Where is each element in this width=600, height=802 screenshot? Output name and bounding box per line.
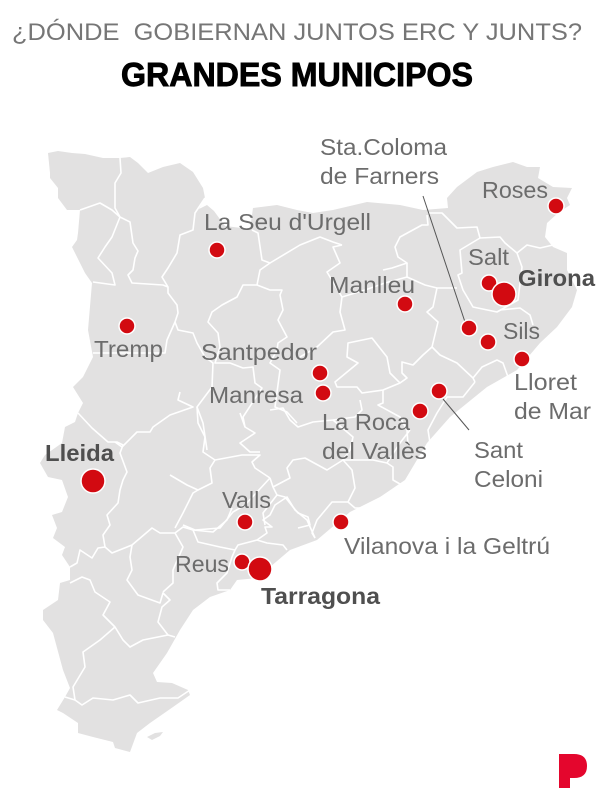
label: Sta. Coloma de Farners [320, 134, 447, 189]
label: La Seu d'Urgell: La Seu d'Urgell [204, 209, 371, 235]
marker: Lleida [81, 469, 105, 493]
map: comarca borders [65, 158, 553, 705]
label: Sant Celoni [474, 437, 543, 492]
title: question: ¿DÓNDE GOBIERNAN JUNTOS ERC Y JUNTS? [12, 19, 582, 46]
label: Sant Celoni: Celoni [474, 466, 543, 492]
label: Sant Celoni: Sant [474, 437, 524, 463]
marker: Manresa [315, 385, 331, 401]
municipality markers [81, 198, 564, 581]
label: Girona: Girona [518, 265, 595, 291]
marker: Reus [234, 554, 250, 570]
label: Lloret de Mar: de Mar [514, 398, 591, 424]
marker: Santpedor [312, 365, 328, 381]
map: territory silhouette [40, 151, 577, 752]
marker: Tremp [119, 318, 135, 334]
heading: grandes municipios: GRANDES MUNICIPOS [121, 56, 473, 93]
label: Tarragona: Tarragona [261, 583, 380, 609]
marker: Vilanova i la Geltrú [333, 514, 349, 530]
label: La Roca del Vallès [322, 409, 427, 464]
marker: Sant Celoni [431, 383, 447, 399]
label: La Roca del Vallès: La Roca [322, 409, 410, 435]
marker: Valls [237, 514, 253, 530]
label: Lloret de Mar: Lloret [514, 369, 578, 395]
icon: publisher logo P [559, 754, 587, 788]
marker: Sta. Coloma de Farners [461, 320, 477, 336]
label: Sta. Coloma de Farners: de Farners [320, 163, 439, 189]
map of Catalonia [40, 151, 577, 752]
marker: La Seu d'Urgell [209, 242, 225, 258]
map: Ebro island [147, 732, 163, 740]
label: Santpedor: Santpedor [201, 339, 317, 365]
label: La Roca del Vallès: del Vallès [322, 438, 427, 464]
marker: Roses [548, 198, 564, 214]
label: Valls: Valls [222, 487, 271, 513]
marker: Girona [492, 282, 516, 306]
marker: Sils [480, 334, 496, 350]
label: Manlleu: Manlleu [329, 272, 415, 298]
label: Lloret de Mar [514, 369, 591, 424]
label: Reus: Reus [175, 551, 229, 577]
label: Salt: Salt [468, 244, 510, 270]
leader line: Sta. Coloma de Farners [423, 196, 465, 322]
leader line: Sant Celoni [443, 399, 469, 430]
label: Sta. Coloma de Farners: Sta.Coloma [320, 134, 447, 160]
label: Tremp: Tremp [94, 336, 163, 362]
label: Vilanova i la Geltrú: Vilanova i la Geltrú [344, 533, 550, 559]
marker: Manlleu [397, 296, 413, 312]
label: Sils: Sils [503, 318, 540, 344]
label: Lleida: Lleida [45, 440, 114, 466]
marker: Lloret de Mar [514, 351, 530, 367]
label: Manresa: Manresa [209, 382, 303, 408]
marker: Salt [481, 275, 497, 291]
marker: La Roca del Vallès [412, 403, 428, 419]
marker: Tarragona [248, 557, 272, 581]
label: Roses: Roses [482, 177, 548, 203]
